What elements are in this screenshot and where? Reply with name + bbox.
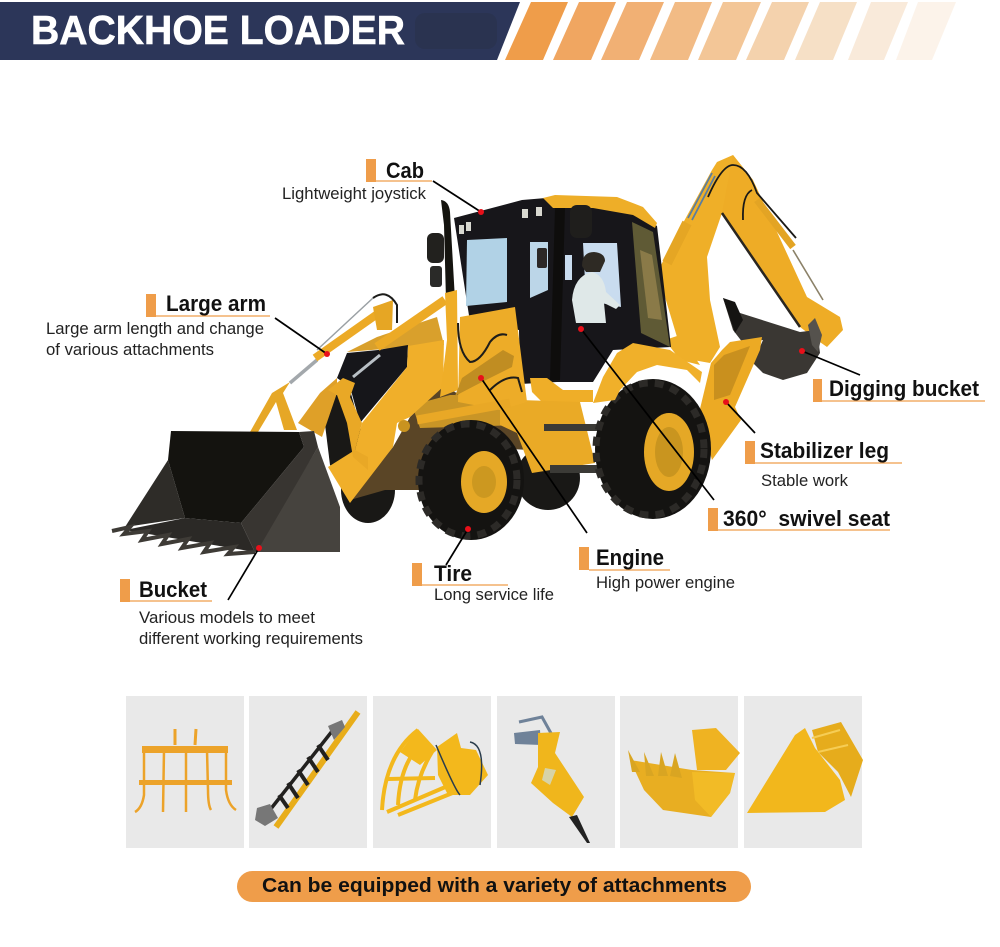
boom hoses [708,165,796,238]
callout: bucket [120,545,363,648]
callout: cab [282,158,484,215]
header banner [0,2,956,60]
tower [440,290,458,397]
rear hidden tires and chassis shadow [322,390,580,523]
lower beam [398,403,510,432]
door lamp [537,248,547,268]
operator [572,252,620,323]
callout: digging bucket [799,348,985,402]
rear window [632,222,670,347]
rear upper cylinder with arm [290,294,397,383]
front grille [337,345,408,423]
callout: large arm [46,291,330,359]
main loader boom [328,340,444,503]
dark arm recess [455,350,514,396]
digging bucket [723,298,822,380]
backhoe loader machine [112,155,843,554]
callout: digging bucket: Digging bucket [829,376,980,401]
callout: bucket: Various models to meet [139,608,315,627]
callout: 360 swivel seat: 360° swivel seat [723,506,891,531]
loader bucket [112,431,340,554]
work lamp [430,266,442,287]
boom rods [688,173,715,220]
attachment panel: bucket [744,696,863,848]
boom lift cylinder [667,223,687,263]
callout: stabilizer leg [723,399,902,490]
rear chassis body [500,400,595,473]
header stripes [505,2,956,60]
callout: large arm: of various attachments [46,340,214,359]
side mirror [427,233,444,263]
inner curved arm [298,378,337,437]
attachment panel: rake [126,696,244,848]
front linkage [250,382,297,432]
callout: stabilizer leg: Stabilizer leg [760,438,889,463]
attachment panel: auger [249,696,367,848]
rear tire [595,379,711,519]
callout: engine: High power engine [596,573,735,592]
cab roof [543,195,657,228]
callout: bucket: different working requirements [139,629,363,648]
caption pill [237,871,751,902]
under cab step [530,378,593,402]
exhaust stack [441,200,455,300]
bell crank [328,378,368,470]
engine hoses [458,323,522,392]
callout: cab: Lightweight joystick [282,184,426,203]
chassis backing [350,385,530,500]
callout: tire: Long service life [434,585,554,604]
dipper cylinder and rod [757,200,823,300]
callout: tire: Tire [434,561,472,586]
attachment panel: digging bucket [620,696,740,848]
cab frame [454,198,671,384]
caption pill: Can be equipped with a variety of attachments [262,874,727,897]
attachment panel: hydraulic breaker [497,696,615,848]
callout: bucket: Bucket [139,577,208,602]
callout: tire [412,526,554,604]
hood [347,317,444,352]
callout: engine [478,375,735,592]
callout: stabilizer leg: Stable work [761,471,848,490]
rear fender [593,343,702,403]
backhoe boom [660,155,753,363]
roof lamps [459,207,542,234]
callout: cab: Cab [386,158,424,183]
front panel [458,307,527,410]
attachment panel: grapple [373,696,491,848]
driver window [583,243,621,307]
left window [466,238,507,306]
step plates [544,424,607,473]
callout: large arm: Large arm [166,291,266,316]
backhoe dipper arm [722,155,843,347]
callout: 360 swivel seat [578,326,891,531]
door mirror [570,205,592,238]
title: BACKHOE LOADER [31,7,405,53]
front tire [418,420,524,540]
bucket teeth [112,527,255,554]
callout: large arm: Large arm length and change [46,319,264,338]
stabilizer leg [699,337,762,460]
callout: engine: Engine [596,545,664,570]
door glass [530,242,548,298]
cab door column [550,208,565,380]
front boom cylinder [353,300,445,377]
